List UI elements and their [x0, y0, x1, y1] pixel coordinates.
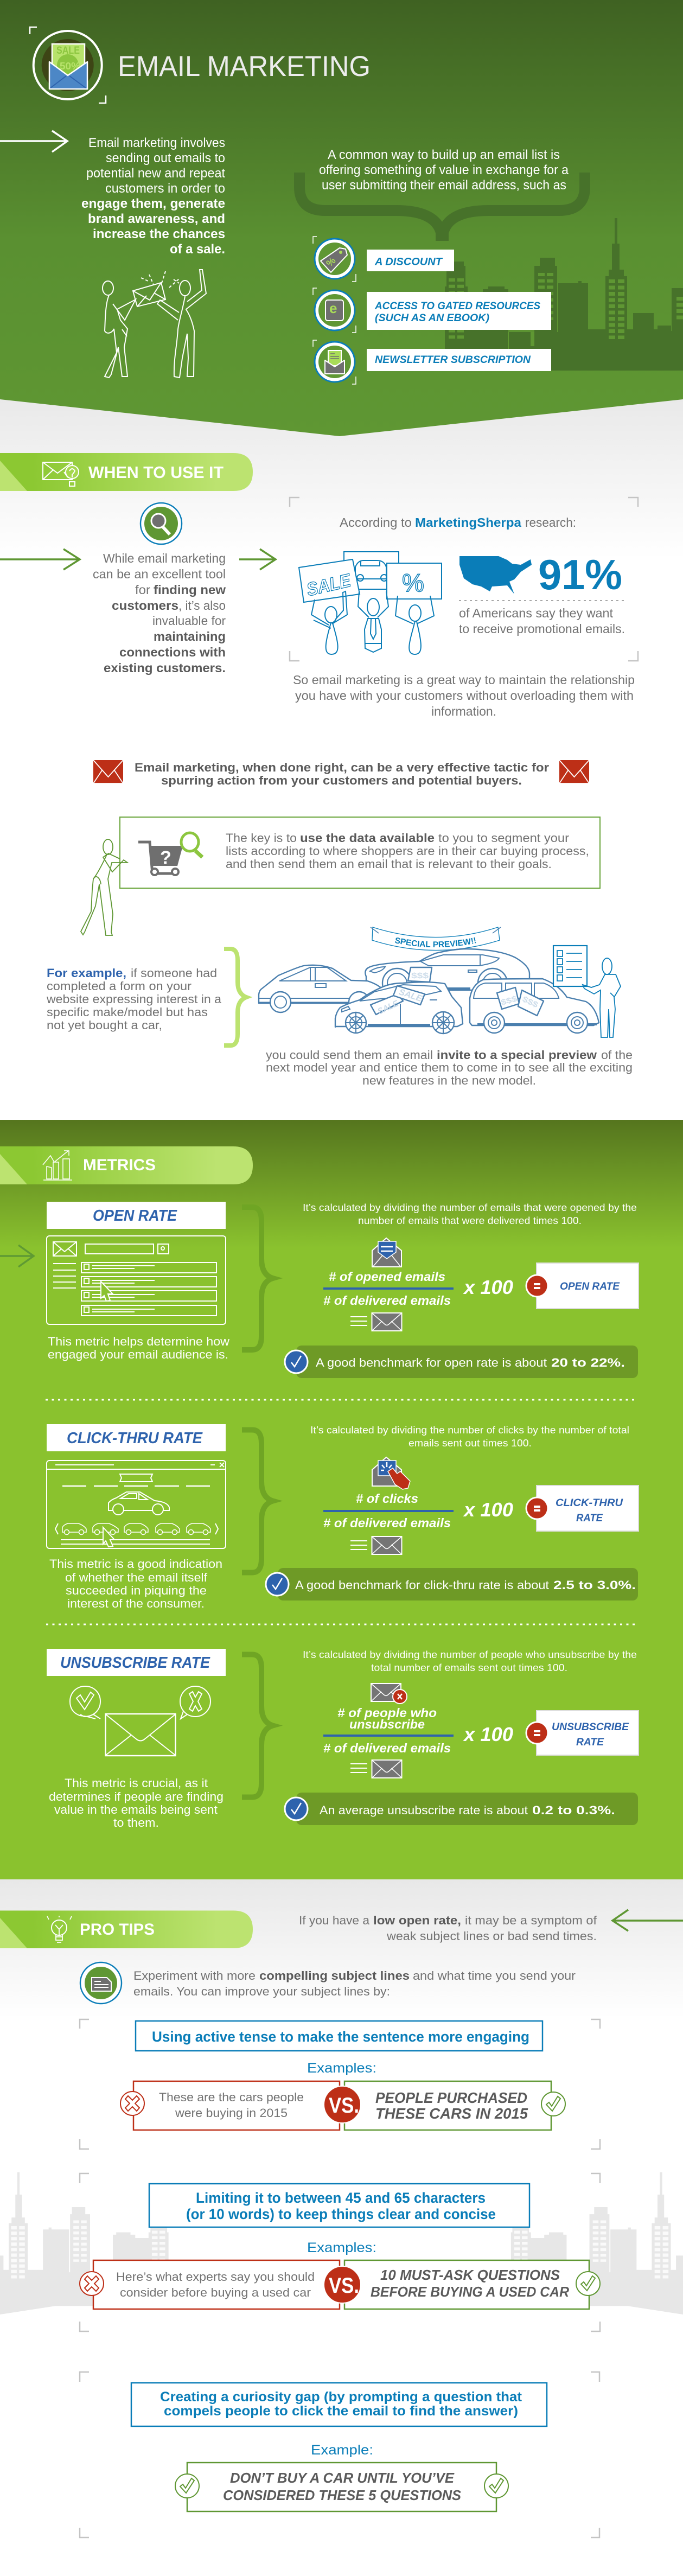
- stat caption: [459, 606, 625, 636]
- text block: the key: to you to segment your: [438, 831, 569, 845]
- text block: click-thru meaning: This metric is a good indication: [49, 1557, 222, 1571]
- text block: the key: lists according to where shoppers are in their car buying process,: [226, 844, 589, 858]
- benchmark: open rate: [285, 1346, 638, 1378]
- text block: unsubscribe calculation: [303, 1649, 637, 1673]
- text block: maintain relationship: So email marketing is a great way to maintain the relationship: [293, 673, 635, 687]
- compare: good example three: CONSIDERED THESE 5 QUESTIONS: [223, 2487, 462, 2503]
- versus badge two: [324, 2266, 361, 2303]
- benchmark: unsubscribe rate: An average unsubscribe rate is about: [320, 1803, 528, 1817]
- skyline: pro tips left: [0, 2172, 169, 2306]
- text block: unsubscribe meaning: [49, 1776, 224, 1829]
- illustration: cars with special preview banner: $$$: [500, 994, 519, 1008]
- icon: ebook: [315, 290, 355, 330]
- result: open rate: [526, 1263, 639, 1309]
- label: click-thru rate: CLICK-THRU RATE: [67, 1430, 203, 1447]
- formula: click-thru rate: # of delivered emails: [323, 1516, 451, 1530]
- compare: good example two: BEFORE BUYING A USED CAR: [371, 2284, 569, 2300]
- option: newsletter subscription: [367, 349, 551, 371]
- compare: bad example one: [120, 2081, 340, 2130]
- compare: good example three: [175, 2463, 508, 2511]
- text block: email marketing definition: of a sale.: [170, 242, 225, 257]
- divider: [459, 600, 624, 601]
- text block: click-thru meaning: succeeded in piquing the: [66, 1584, 207, 1597]
- examples label: Examples:: [307, 2061, 376, 2076]
- text block: for example: specific make/model but has: [47, 1005, 208, 1019]
- label: click-thru rate: [47, 1424, 226, 1451]
- icon: document badge: [80, 1962, 122, 2004]
- text block: compelling subject lines: [133, 1969, 576, 1998]
- arrow: to research: [239, 549, 276, 570]
- formula: unsubscribe rate: x 100: [463, 1723, 513, 1745]
- text block: when to use: , it’s also: [178, 598, 226, 613]
- heading: pro tips: PRO TIPS: [80, 1921, 155, 1939]
- label: unsubscribe rate: UNSUBSCRIBE RATE: [60, 1654, 211, 1672]
- compare: good example one: PEOPLE PURCHASED: [375, 2089, 527, 2106]
- corner brackets: tip one: [80, 2019, 600, 2149]
- benchmark: click-thru rate: A good benchmark for click-thru rate is about: [295, 1578, 549, 1592]
- research source line: [340, 515, 576, 530]
- compare: good example one: THESE CARS IN 2015: [375, 2105, 528, 2122]
- compare: bad example two: Here’s what experts say you should: [116, 2270, 315, 2284]
- example label: Example:: [311, 2443, 373, 2458]
- icon: newsletter envelope: [315, 342, 355, 382]
- text block: click-thru calculation: It’s calculated by dividing the number of clicks by the number of total: [310, 1425, 629, 1436]
- arrow: metrics: [0, 1245, 34, 1267]
- formula: open rate: # of delivered emails: [323, 1293, 451, 1308]
- result: unsubscribe rate: [526, 1711, 639, 1755]
- result: unsubscribe rate: UNSUBSCRIBE: [552, 1721, 629, 1733]
- text block: build an email list: A common way to build up an email list is: [328, 148, 560, 162]
- panel: header with chevron bottom: [0, 0, 683, 436]
- text block: maintain relationship: [293, 673, 635, 718]
- header skyline: [445, 218, 683, 371]
- illustration: cars with special preview banner: SALE: [376, 999, 400, 1017]
- text block: the key: [226, 831, 589, 871]
- research source line: According to: [340, 515, 412, 530]
- benchmark: open rate: 20 to 22%.: [551, 1356, 625, 1369]
- panel: pro tips background: [0, 1879, 683, 2576]
- versus badge one: VS.: [329, 2094, 359, 2118]
- arrow: intro: [0, 131, 67, 152]
- text block: maintain relationship: you have with your customers without overloading them with: [295, 688, 634, 703]
- stat: 91 percent: 91%: [538, 551, 622, 598]
- text block: for example: if someone had: [131, 966, 217, 980]
- text block: when to use: maintaining: [154, 629, 226, 643]
- icon: unsubscribed email: [371, 1684, 407, 1704]
- text block: build an email list: user submitting their email address, such as: [322, 178, 566, 193]
- text block: click-thru calculation: emails sent out times 100.: [408, 1438, 532, 1449]
- text block: unsubscribe calculation: total number of emails sent out times 100.: [371, 1662, 567, 1673]
- illustration: inbox window: [47, 1236, 226, 1324]
- compare: good example one: [344, 2081, 565, 2130]
- text block: email marketing definition: increase the chances: [93, 227, 225, 241]
- heading: when to use it: WHEN TO USE IT: [88, 463, 224, 482]
- formula: click-thru rate: x 100: [463, 1499, 513, 1521]
- illustration: people with signs: [299, 552, 442, 654]
- text block: open rate meaning: [48, 1335, 229, 1361]
- map: united states: [459, 556, 532, 594]
- icon: ebook: e: [329, 300, 337, 316]
- heading: metrics: METRICS: [83, 1156, 156, 1174]
- formula: open rate: x 100: [463, 1276, 513, 1298]
- text block: low open rate: [299, 1914, 597, 1943]
- text block: low open rate: weak subject lines or bad send times.: [386, 1929, 597, 1943]
- text block: when to use: While email marketing: [103, 551, 226, 565]
- logo badge: [30, 27, 106, 103]
- versus badge one: [324, 2086, 361, 2123]
- corner brackets: research: [290, 498, 638, 661]
- text block: when to use: invaluable for: [152, 614, 226, 628]
- illustration: two people holding envelope: [103, 258, 206, 378]
- formula: open rate: [323, 1270, 513, 1331]
- text block: send invite: new features in the new model.: [362, 1074, 536, 1087]
- brace: unsubscribe: [242, 1655, 273, 1797]
- text block: the key: The key is to: [226, 831, 297, 845]
- brace: header options: [299, 173, 585, 241]
- logo badge: SALE: [56, 45, 80, 56]
- text block: the key: use the data available: [300, 831, 435, 845]
- text block: low open rate: low open rate,: [373, 1914, 461, 1927]
- text block: build an email list: offering something of value in exchange for a: [319, 163, 569, 177]
- option: gated resources: [367, 292, 551, 330]
- icon: discount tag: %: [324, 255, 338, 269]
- text block: build an email list: [319, 148, 569, 193]
- formula: click-thru rate: [323, 1491, 513, 1554]
- option: newsletter subscription: NEWSLETTER SUBSCRIPTION: [375, 354, 531, 366]
- ground slants: [0, 2306, 683, 2314]
- benchmark: open rate: A good benchmark for open rate is about: [316, 1356, 547, 1369]
- text block: when to use: existing customers.: [104, 661, 226, 675]
- benchmark: unsubscribe rate: [285, 1793, 638, 1825]
- compare: good example two: 10 MUST-ASK QUESTIONS: [380, 2267, 560, 2283]
- heading: metrics: [0, 1146, 253, 1184]
- skyline: pro tips right: [511, 2172, 683, 2306]
- text block: email marketing definition: Email marketing involves: [88, 136, 225, 150]
- text block: email marketing definition: sending out emails to: [106, 151, 225, 165]
- illustration: cars with special preview banner: $$$: [521, 994, 540, 1010]
- text block: compelling subject lines: Experiment with more: [133, 1969, 256, 1982]
- text block: when to use: connections with: [119, 645, 226, 659]
- tip two heading: (or 10 words) to keep things clear and concise: [186, 2206, 496, 2222]
- formula: unsubscribe rate: unsubscribe: [349, 1717, 425, 1731]
- research source line: research:: [525, 515, 576, 530]
- corner brackets: tip two: [80, 2173, 600, 2331]
- text block: open rate calculation: It’s calculated by dividing the number of emails that were opened by the: [303, 1202, 637, 1213]
- compare: bad example two: [80, 2260, 340, 2309]
- illustration: envelope with yes and no bubbles: [70, 1686, 210, 1756]
- title: EMAIL MARKETING: [118, 50, 371, 82]
- text block: send invite: invite to a special preview: [437, 1048, 597, 1062]
- text block: for example: not yet bought a car,: [47, 1018, 162, 1032]
- examples label: Examples:: [307, 2240, 376, 2255]
- text block: when to use: for: [135, 583, 150, 597]
- text block: when to use: finding new: [154, 583, 226, 597]
- text block: the key: and then send them an email that is relevant to their goals.: [226, 857, 552, 871]
- formula: unsubscribe rate: # of delivered emails: [323, 1741, 451, 1755]
- benchmark: click-thru rate: 2.5 to 3.0%.: [553, 1578, 636, 1592]
- text block: when to use: can be an excellent tool: [93, 567, 226, 581]
- versus badge two: VS.: [329, 2274, 359, 2298]
- icon: shopping cart with magnifier: [138, 833, 202, 875]
- text block: unsubscribe meaning: to them.: [113, 1816, 159, 1829]
- heading: pro tips: [0, 1911, 253, 1948]
- formula: unsubscribe rate: [323, 1706, 513, 1778]
- callout: effective tactic: Email marketing, when done right, can be a very effective tactic for: [135, 761, 549, 774]
- illustration: people with signs: SALE: [305, 570, 353, 600]
- panel: metrics background: [0, 1120, 683, 1879]
- text block: unsubscribe meaning: determines if people are finding: [49, 1790, 224, 1803]
- tip two heading: Limiting it to between 45 and 65 characters: [196, 2190, 486, 2206]
- text block: for example: website expressing interest in a: [46, 992, 222, 1006]
- text block: send invite: of the: [601, 1048, 633, 1062]
- divider: [46, 1399, 636, 1401]
- text block: maintain relationship: information.: [431, 704, 496, 718]
- text block: low open rate: it may be a symptom of: [465, 1914, 597, 1927]
- text block: click-thru calculation: [310, 1425, 629, 1449]
- option: gated resources: (SUCH AS AN EBOOK): [375, 313, 489, 324]
- stat caption: of Americans say they want: [459, 606, 614, 620]
- text block: open rate calculation: number of emails that were delivered times 100.: [358, 1215, 582, 1226]
- text block: click-thru meaning: interest of the consumer.: [67, 1597, 205, 1610]
- heading: when to use it: [0, 453, 253, 491]
- option: a discount: [367, 250, 454, 271]
- brace: open rate: [242, 1207, 273, 1350]
- compare: bad example one: were buying in 2015: [175, 2106, 288, 2120]
- illustration: cars with special preview banner: SPECIAL PREVIEW!!: [395, 938, 476, 947]
- tip three heading: compels people to click the email to find the answer): [164, 2403, 518, 2419]
- tip three heading: Creating a curiosity gap (by prompting a question that: [160, 2389, 522, 2405]
- option: a discount: A DISCOUNT: [374, 256, 443, 268]
- compare: bad example two: consider before buying a used car: [120, 2286, 311, 2299]
- text block: compelling subject lines: compelling subject lines: [259, 1969, 410, 1982]
- icon: red envelope right: [559, 760, 589, 783]
- arrow: pro tips: [612, 1910, 683, 1931]
- text block: send invite: [266, 1048, 633, 1087]
- label: open rate: OPEN RATE: [93, 1207, 178, 1225]
- icon: discount tag: [313, 237, 356, 384]
- illustration: cars with special preview banner: [258, 927, 600, 1034]
- text block: send invite: you could send them an email: [266, 1048, 433, 1062]
- stat caption: to receive promotional emails.: [459, 622, 625, 636]
- formula: unsubscribe rate: # of people who: [337, 1706, 437, 1720]
- text block: email marketing definition: brand awareness, and: [88, 212, 225, 226]
- callout: effective tactic: spurring action from your customers and potential buyers.: [161, 774, 522, 787]
- illustration: browser window with cars: [47, 1461, 226, 1548]
- result: unsubscribe rate: RATE: [576, 1737, 604, 1748]
- illustration: green person leaning on panel: [81, 839, 127, 935]
- text block: open rate calculation: [303, 1202, 637, 1226]
- text block: email marketing definition: [81, 136, 225, 257]
- label: unsubscribe rate: [47, 1649, 226, 1676]
- text block: for example: completed a form on your: [47, 979, 192, 993]
- illustration: checklist and person: [553, 946, 621, 1037]
- icon: red envelope left: [93, 760, 123, 783]
- illustration: cars with special preview banner: $$$: [411, 971, 429, 980]
- tip two heading: [149, 2184, 529, 2227]
- icon: opened email: [372, 1238, 401, 1267]
- text block: when to use: customers: [112, 598, 178, 613]
- text block: email marketing definition: potential new and repeat: [86, 166, 225, 181]
- result: click-thru rate: RATE: [576, 1513, 603, 1524]
- text block: open rate meaning: engaged your email audience is.: [48, 1348, 228, 1361]
- formula: open rate: # of opened emails: [329, 1270, 445, 1284]
- benchmark: click-thru rate: [266, 1568, 638, 1601]
- result: open rate: OPEN RATE: [560, 1281, 620, 1292]
- logo badge: 50%: [60, 61, 80, 72]
- text block: email marketing definition: customers in order to: [105, 181, 225, 196]
- text block: unsubscribe calculation: It’s calculated by dividing the number of people who unsubscribe by the: [303, 1649, 637, 1660]
- text block: compelling subject lines: and what time you send your: [413, 1969, 576, 1982]
- tip three heading: [131, 2383, 547, 2426]
- text block: when to use: [93, 551, 226, 675]
- result: click-thru rate: CLICK-THRU: [556, 1497, 623, 1509]
- result: click-thru rate: [526, 1485, 639, 1531]
- compare: bad example one: These are the cars people: [159, 2090, 304, 2104]
- text block: for example: [46, 966, 222, 1032]
- icon: shopping cart with magnifier: ?: [160, 847, 171, 868]
- corner brackets: tip three: [80, 2372, 599, 2537]
- text block: compelling subject lines: emails. You can improve your subject lines by:: [133, 1985, 390, 1998]
- brace: example to cars: [224, 949, 246, 1045]
- text block: email marketing definition: engage them, generate: [81, 196, 225, 211]
- text block: open rate meaning: This metric helps determine how: [48, 1335, 229, 1348]
- arrow: to text: [0, 549, 80, 570]
- option: gated resources: ACCESS TO GATED RESOURCES: [374, 301, 540, 312]
- divider: [46, 1623, 636, 1625]
- text block: click-thru meaning: [49, 1557, 222, 1610]
- tip one heading: [136, 2021, 542, 2051]
- compare: good example three: DON’T BUY A CAR UNTIL YOU’VE: [230, 2470, 455, 2486]
- formula: click-thru rate: # of clicks: [356, 1491, 418, 1506]
- text block: unsubscribe meaning: This metric is crucial, as it: [65, 1776, 208, 1790]
- illustration: people with signs: %: [402, 569, 424, 597]
- text block: for example: For example,: [47, 966, 126, 980]
- tip one heading: Using active tense to make the sentence more engaging: [152, 2029, 529, 2045]
- research source line: MarketingSherpa: [415, 515, 521, 530]
- icon: clicked email: [372, 1457, 410, 1489]
- compare: good example two: [344, 2260, 600, 2309]
- text block: send invite: next model year and entice them to come in to see all the exciting: [266, 1061, 633, 1074]
- background: when to use it section: [0, 399, 683, 1120]
- icon: magnifier badge: [141, 503, 182, 544]
- label: open rate: [47, 1202, 226, 1229]
- brace: click-thru: [242, 1430, 273, 1572]
- callout: effective tactic: [135, 761, 549, 787]
- panel: use the data: [120, 817, 600, 888]
- illustration: cars with special preview banner: SALE: [398, 987, 424, 1004]
- benchmark: unsubscribe rate: 0.2 to 0.3%.: [532, 1803, 615, 1817]
- text block: unsubscribe meaning: value in the emails being sent: [54, 1803, 218, 1816]
- text block: click-thru meaning: of whether the email itself: [65, 1571, 208, 1584]
- text block: low open rate: If you have a: [299, 1914, 370, 1927]
